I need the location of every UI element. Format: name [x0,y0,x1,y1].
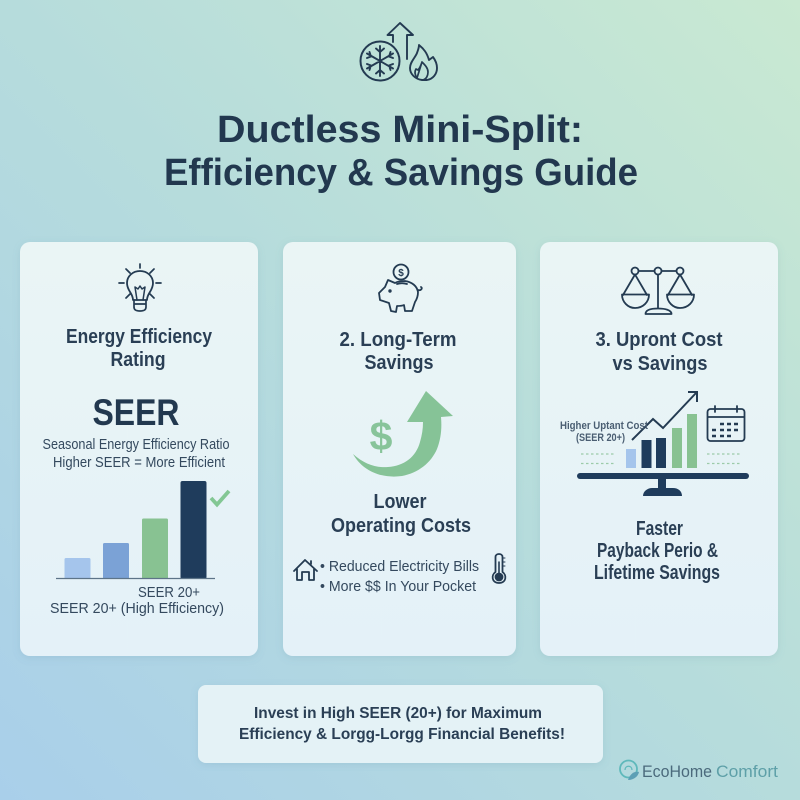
card heading [596,329,723,375]
closing text: Lifetime Savings [594,562,720,584]
icon: light bulb [119,264,161,311]
title: Efficiency & Savings Guide [164,152,638,194]
title: Ductless Mini-Split: [217,109,583,151]
benefits list: • Reduced Electricity Bills [320,559,479,575]
chart caption: SEER 20+ (High Efficiency) [50,601,224,617]
chart label [560,420,648,444]
subheading: Lower [374,491,427,513]
icon: snowflake, arrow and flame [360,23,437,80]
chart caption [50,585,224,617]
bar chart: SEER levels [56,481,229,579]
logo: EcoHome Comfort: EcoHome [642,762,712,781]
card heading: vs Savings [612,353,708,375]
icon: piggy bank: $ [398,268,404,279]
icon: piggy bank [379,264,422,312]
callout: recommendation banner [198,685,603,763]
icon: check mark [211,491,229,504]
card heading: 2. Long-Term [340,329,456,351]
icon: logo swirl [620,760,639,780]
closing text: Faster [636,518,683,540]
subheading [331,491,471,537]
chart label: (SEER 20+) [576,432,625,444]
callout: recommendation banner: Invest in High SEER (20+) for Maximum [254,705,542,722]
chart label: Higher Uptant Cost [560,420,648,432]
icon: thermometer [493,554,505,583]
card heading [340,329,456,374]
closing text [594,518,720,584]
closing text: Payback Perio & [597,540,718,562]
SEER definition: Seasonal Energy Efficiency Ratio [42,437,230,453]
icon: balance scale [622,268,694,314]
arrow: rising savings [353,391,453,477]
dollar sign: $ [370,413,393,459]
subheading: Operating Costs [331,515,471,537]
card heading [66,326,213,371]
bar chart on balance beam [580,392,746,496]
panel: long-term savings [283,242,516,656]
card heading: 3. Upront Cost [596,329,723,351]
card heading: Energy Efficiency [66,326,213,348]
icon: house [294,560,317,580]
panel: energy efficiency rating [20,242,258,656]
benefits list [320,559,479,595]
panel: upfront cost vs savings [540,242,778,656]
logo: EcoHome Comfort: Comfort [716,762,778,781]
callout: recommendation banner: Efficiency & Lorgg-Lorgg Financial Benefits! [239,726,565,743]
card heading: Rating [110,349,166,371]
SEER heading: SEER [92,392,180,433]
logo: EcoHome Comfort [620,760,778,781]
chart caption: SEER 20+ [138,585,200,601]
SEER definition: Higher SEER = More Efficient [53,455,225,471]
SEER definition [42,437,230,471]
title [164,109,638,194]
icon: calendar [708,406,744,441]
card heading: Savings [364,352,434,374]
benefits list: • More $$ In Your Pocket [320,579,476,595]
